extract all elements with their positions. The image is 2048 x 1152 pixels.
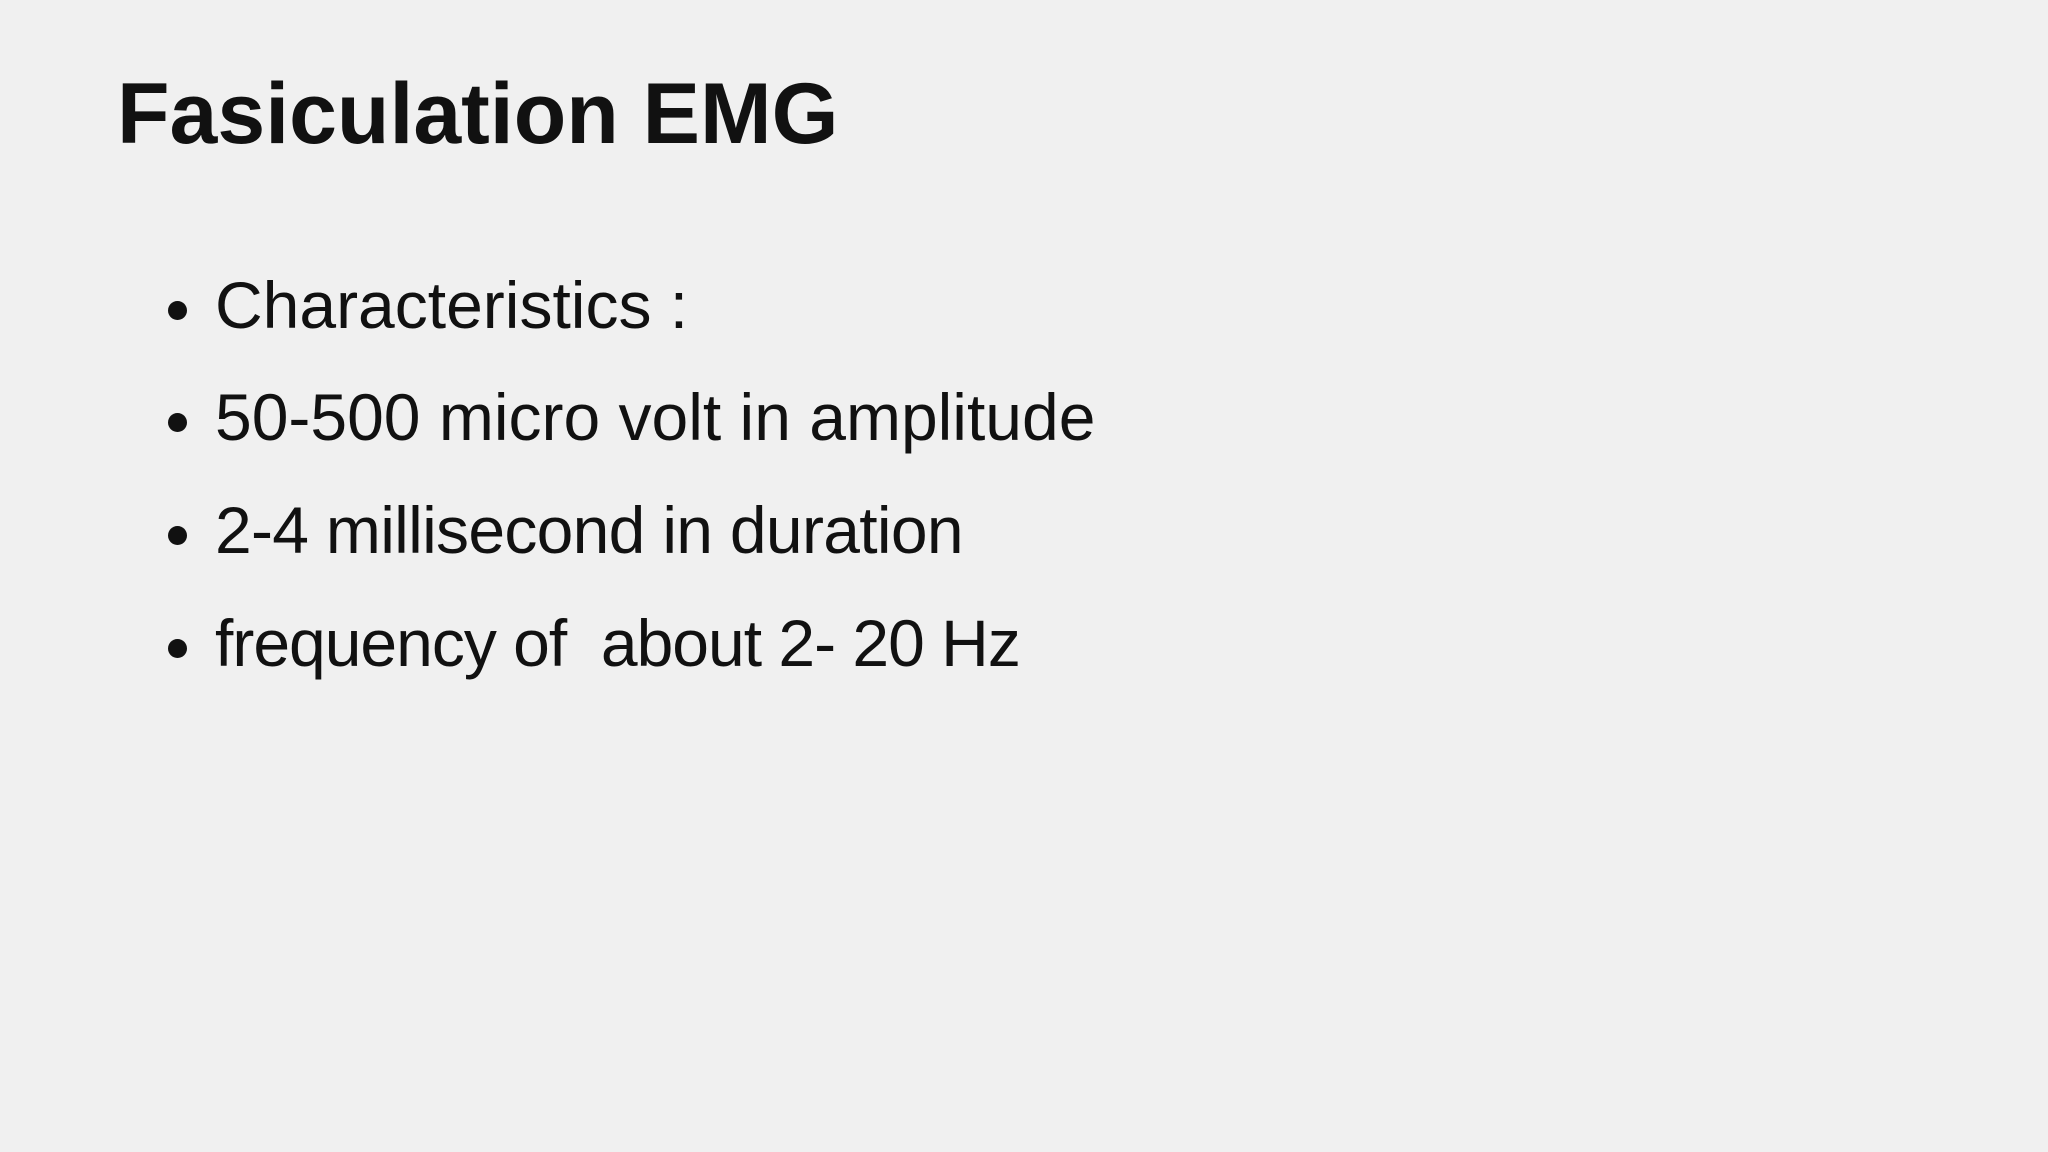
bullet: characteristics: Characteristics : (215, 268, 688, 342)
bullet: frequency: frequency of about 2- 20 Hz (215, 606, 1020, 680)
bullet list (168, 268, 1095, 680)
title: Fasiculation EMG (117, 66, 839, 162)
bullet: duration: 2-4 millisecond in duration (215, 493, 963, 567)
bullet: amplitude: 50-500 micro volt in amplitude (215, 380, 1095, 454)
